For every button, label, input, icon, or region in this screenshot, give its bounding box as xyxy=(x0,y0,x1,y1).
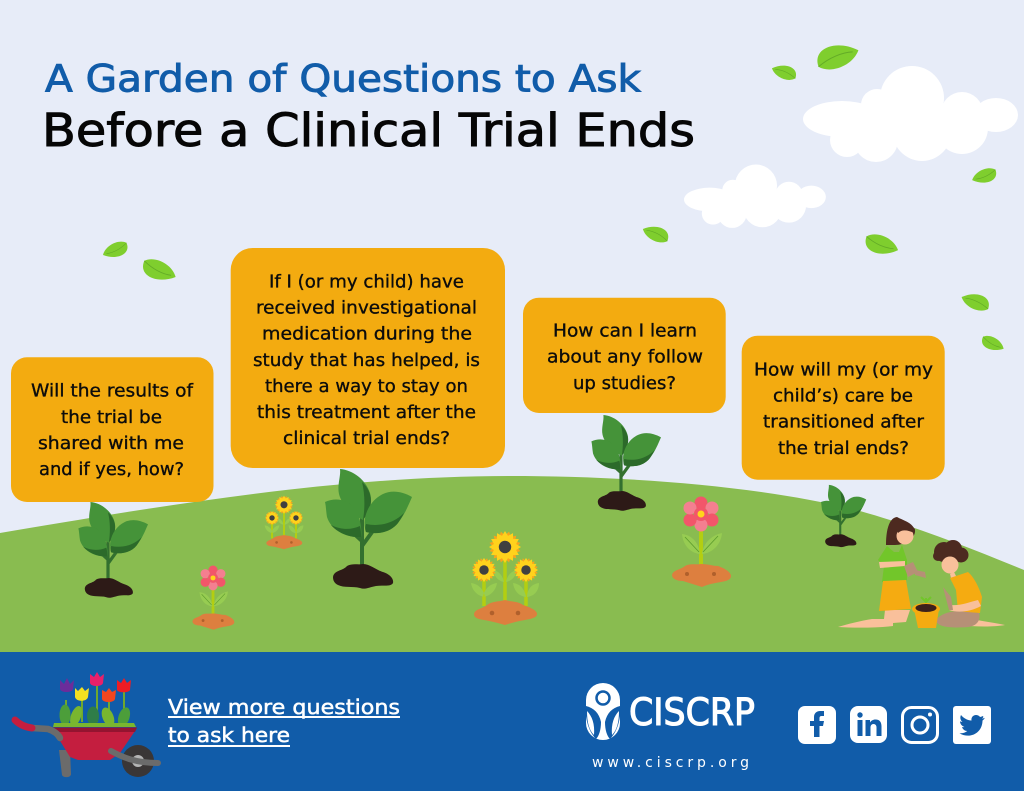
girl xyxy=(838,517,915,628)
question bubble 2: If I (or my child) have xyxy=(269,272,464,292)
question bubble 4: transitioned after xyxy=(763,412,925,432)
question bubble 3: up studies? xyxy=(573,373,676,394)
question bubble 2: medication during the xyxy=(262,324,472,344)
small pink flower xyxy=(192,566,234,630)
title xyxy=(42,58,695,157)
title line 2: Before a Clinical Trial Ends xyxy=(42,104,695,157)
question bubble 4: How will my (or my xyxy=(754,360,933,380)
large sunflowers xyxy=(469,527,541,625)
potted seedling xyxy=(912,597,940,628)
link: view more questions xyxy=(168,695,400,747)
icon: facebook xyxy=(798,706,836,744)
logo: CISCRP xyxy=(586,683,755,771)
question bubble 4: the trial ends? xyxy=(778,438,909,459)
floating leaves xyxy=(101,36,1006,356)
question bubble 3: How can I learn xyxy=(553,320,697,342)
plant under question 2 xyxy=(325,469,412,589)
link: view more questions: to ask here xyxy=(168,723,290,747)
small sunflowers xyxy=(264,494,304,549)
woman xyxy=(933,540,1005,627)
question bubble 2: there a way to stay on xyxy=(265,376,468,397)
icon: instagram xyxy=(902,708,938,742)
large pink flower xyxy=(672,496,731,587)
icon: twitter xyxy=(953,706,991,744)
small cloud xyxy=(684,165,826,228)
question bubble 2: study that has helped, is xyxy=(253,350,480,371)
website address: www.ciscrp.org xyxy=(592,755,749,771)
question bubble 1 xyxy=(11,357,214,502)
question bubble 4 xyxy=(742,336,945,480)
question bubble 2: this treatment after the xyxy=(257,402,476,423)
question bubble 2: received investigational xyxy=(256,298,477,318)
icon: wheelbarrow of tulips xyxy=(15,672,158,777)
large cloud xyxy=(803,66,1018,162)
question bubble 4: child’s) care be xyxy=(773,386,913,406)
watering can xyxy=(904,562,926,578)
question bubble 3: about any follow xyxy=(547,346,703,368)
footer band xyxy=(0,652,1024,791)
logo wordmark: CISCRP xyxy=(629,691,755,734)
question bubble 2: clinical trial ends? xyxy=(283,428,450,449)
link: view more questions: View more questions xyxy=(168,695,400,719)
green hill xyxy=(0,476,1024,652)
question bubble 1: Will the results of xyxy=(31,380,194,402)
plant under question 1 xyxy=(78,502,148,598)
illustration: girl and woman gardening xyxy=(838,517,1005,628)
title line 1: A Garden of Questions to Ask xyxy=(45,58,642,100)
question bubble 2 xyxy=(231,248,505,468)
question bubble 3 xyxy=(523,298,726,413)
icon: linkedin xyxy=(850,706,887,743)
question bubble 1: and if yes, how? xyxy=(39,459,184,480)
plant under question 3 xyxy=(591,415,661,511)
question bubble 1: shared with me xyxy=(38,433,184,454)
plant under question 4 xyxy=(821,485,866,547)
logo mark xyxy=(586,683,620,740)
question bubble 1: the trial be xyxy=(61,407,162,428)
